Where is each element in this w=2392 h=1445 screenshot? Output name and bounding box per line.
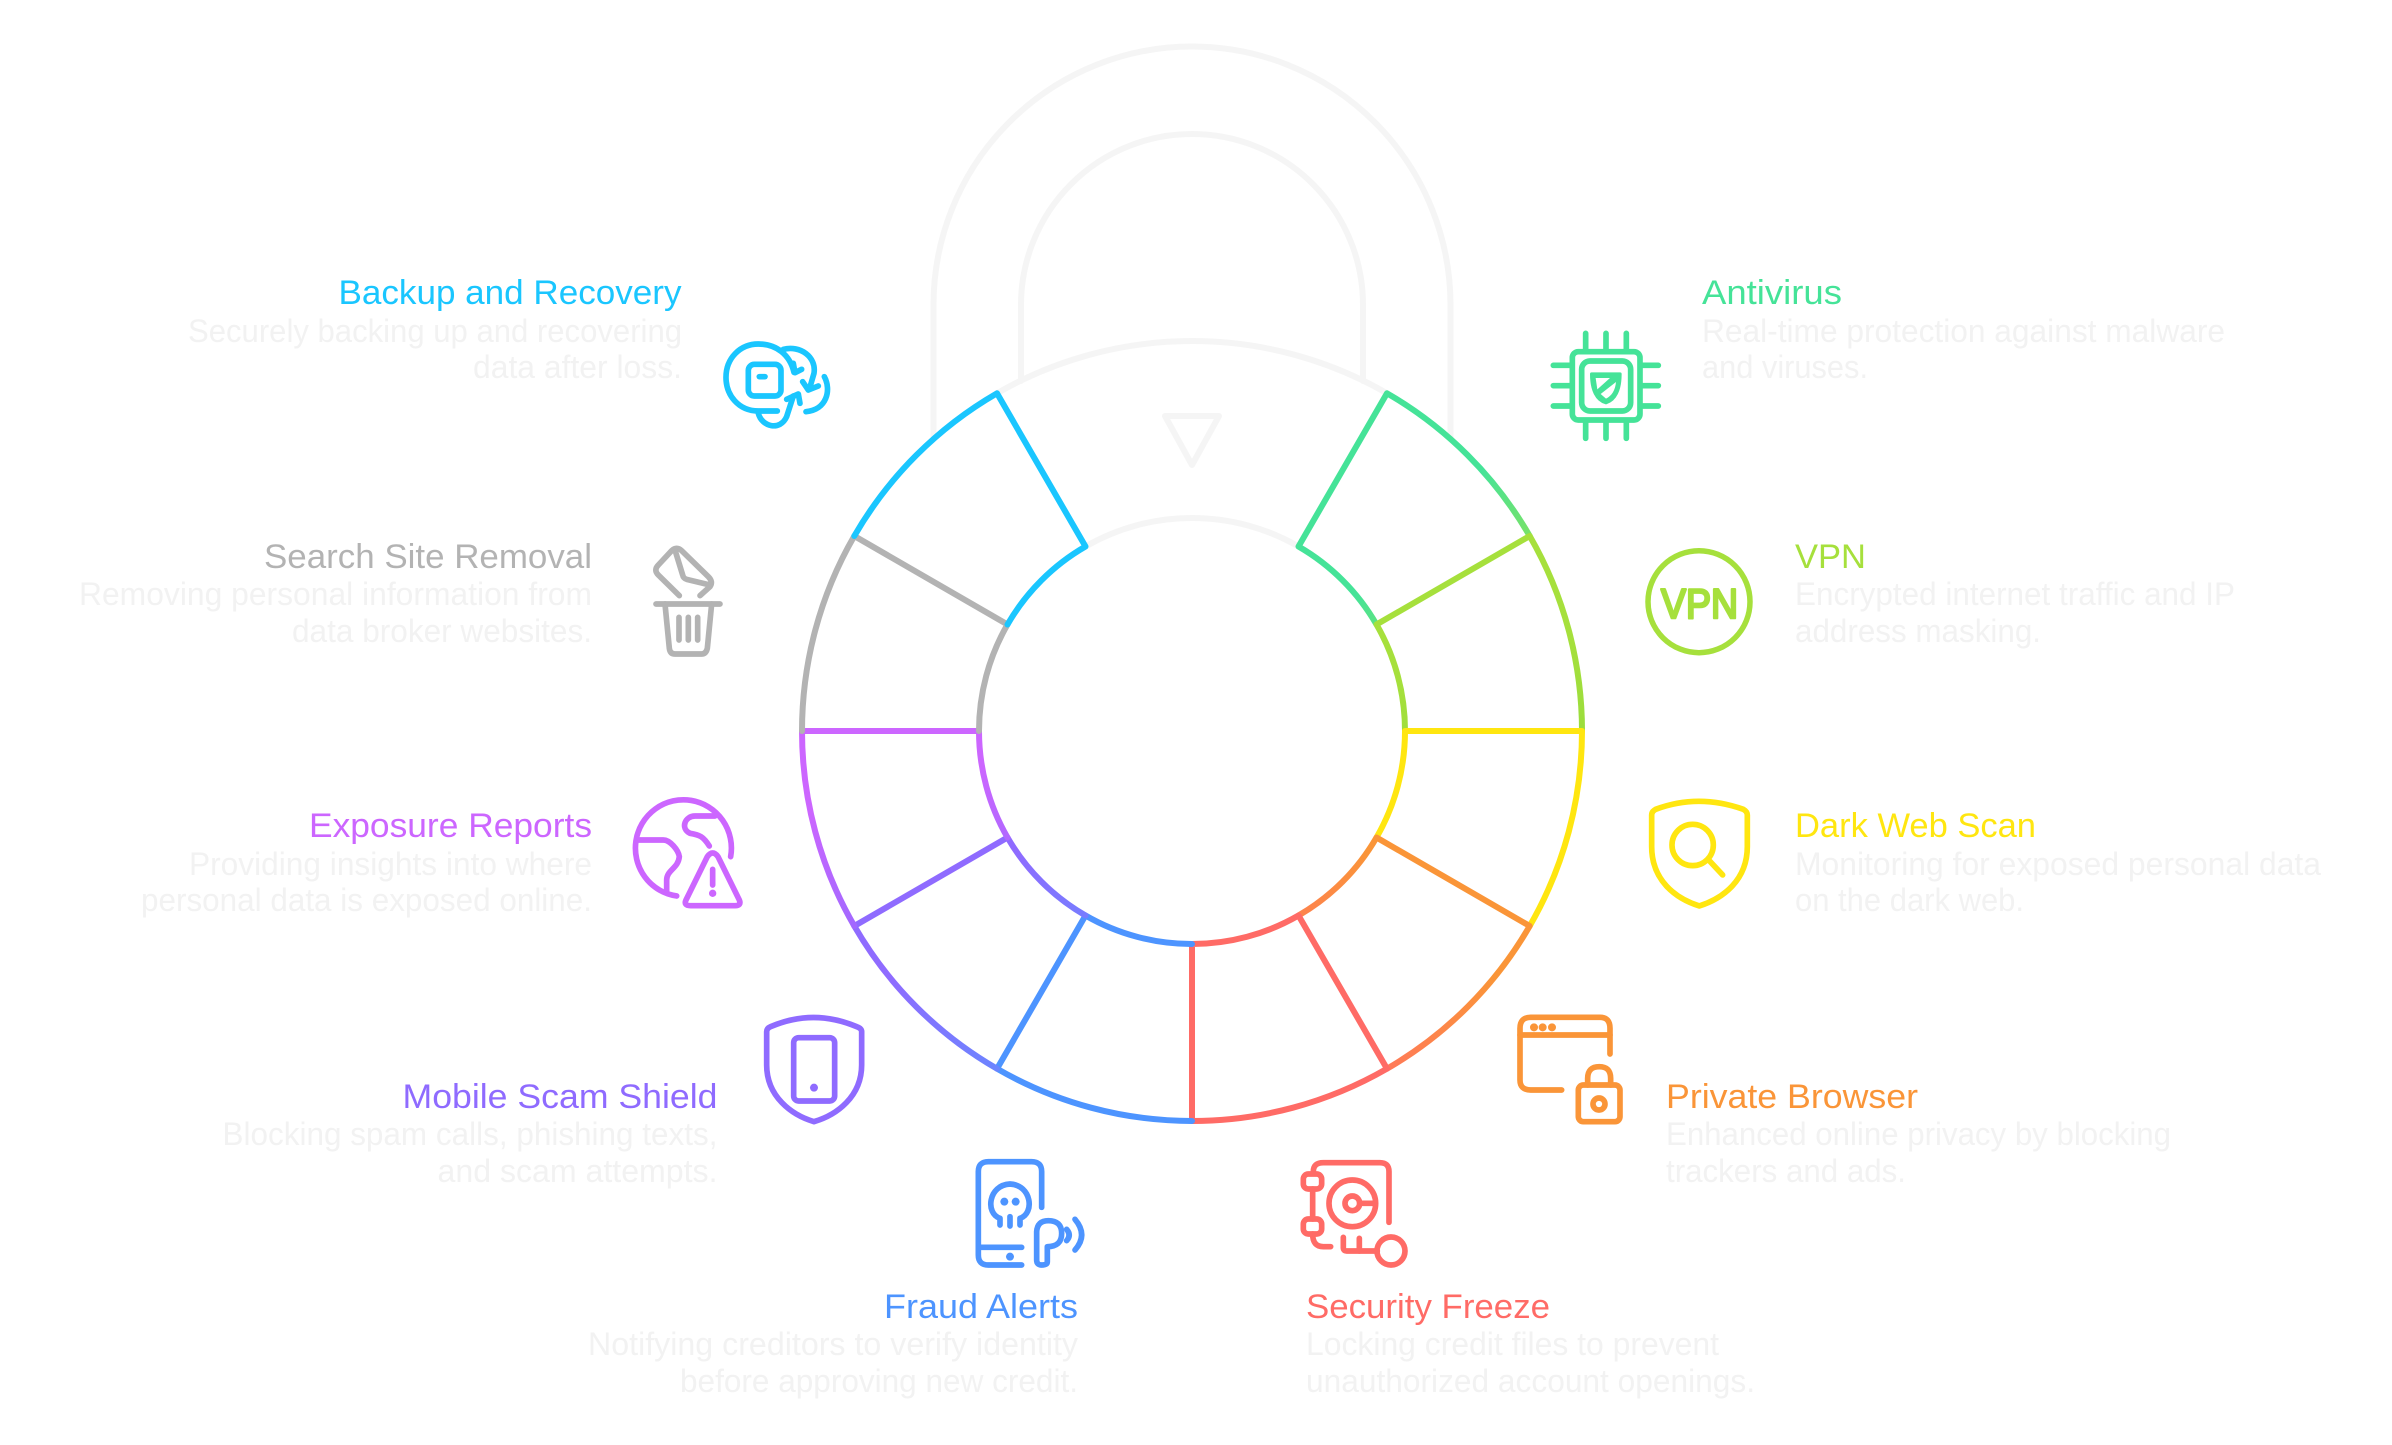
segment: backup and recovery (854, 393, 1086, 624)
label: Private Browser: Enhanced online privacy by blocking (1666, 1116, 2171, 1152)
label: Backup and Recovery: Securely backing up and recovering (188, 313, 682, 349)
label: Fraud Alerts: before approving new credit. (680, 1363, 1078, 1399)
padlock outline (934, 47, 1451, 547)
segment: fraud alerts (997, 916, 1192, 1121)
segment: antivirus (1298, 393, 1530, 624)
label: Security Freeze: unauthorized account openings. (1306, 1363, 1755, 1399)
label: Exposure Reports: Providing insights into where (189, 846, 592, 882)
label: Exposure Reports: personal data is exposed online. (141, 882, 592, 918)
icon: phone with skull and earbud (978, 1162, 1082, 1265)
icon: safe with key (1303, 1163, 1405, 1265)
icon: VPN badge (1648, 551, 1750, 653)
label: Dark Web Scan: Dark Web Scan (1795, 807, 2036, 845)
label: Backup and Recovery (188, 274, 682, 385)
label: Antivirus: Real-time protection against malware (1702, 313, 2225, 349)
keyhole triangle (1165, 416, 1219, 465)
label: Antivirus (1702, 274, 2225, 385)
label: Fraud Alerts: Fraud Alerts (884, 1288, 1078, 1326)
label: Antivirus: Antivirus (1702, 274, 1842, 312)
label: Exposure Reports: Exposure Reports (309, 807, 592, 845)
icon: backup cloud with arrows (726, 344, 828, 426)
label: Security Freeze: Security Freeze (1306, 1288, 1550, 1326)
segment: exposure reports (802, 731, 1008, 926)
label: Search Site Removal (79, 538, 592, 649)
segment: security freeze (1192, 916, 1387, 1121)
lock body inner arc (1086, 518, 1298, 546)
lock body top arc (997, 341, 1387, 393)
label: Search Site Removal: data broker websites. (292, 613, 592, 649)
label: Fraud Alerts: Notifying creditors to verify identity (588, 1326, 1078, 1362)
segmented ring (802, 393, 1582, 1121)
label: Private Browser: Private Browser (1666, 1078, 1918, 1116)
outer shackle (934, 47, 1451, 438)
label: Dark Web Scan: Monitoring for exposed personal data (1795, 846, 2321, 882)
label: Backup and Recovery: data after loss. (473, 349, 682, 385)
icon: shield with magnifier (1652, 801, 1747, 906)
label: Backup and Recovery: Backup and Recovery (338, 274, 682, 312)
label: Fraud Alerts (588, 1288, 1078, 1399)
label: Search Site Removal: Removing personal information from (79, 576, 592, 612)
label: Security Freeze (1306, 1288, 1755, 1399)
icon: VPN badge: VPN (1661, 580, 1738, 627)
label: Mobile Scam Shield (222, 1078, 718, 1189)
label: Dark Web Scan: on the dark web. (1795, 882, 2024, 918)
icon: shield with phone (767, 1017, 862, 1122)
label: Private Browser: trackers and ads. (1666, 1153, 1906, 1189)
label: VPN: VPN (1795, 538, 1866, 576)
segment: private browser (1298, 838, 1530, 1069)
label: Exposure Reports (141, 807, 592, 918)
inner shackle (1021, 134, 1363, 381)
label: Dark Web Scan (1795, 807, 2321, 918)
label: Antivirus: and viruses. (1702, 349, 1868, 385)
label: VPN: Encrypted internet traffic and IP (1795, 576, 2235, 612)
segment: VPN (1376, 536, 1582, 731)
label: Search Site Removal: Search Site Removal (264, 538, 592, 576)
label: Security Freeze: Locking credit files to prevent (1306, 1326, 1719, 1362)
label: Private Browser (1666, 1078, 2171, 1189)
icon: trash bin with envelope (656, 548, 720, 654)
icon: globe with warning (635, 800, 740, 906)
label: VPN: address masking. (1795, 613, 2041, 649)
segment: dark web scan (1376, 731, 1582, 926)
label: Mobile Scam Shield: Blocking spam calls, phishing texts, (222, 1116, 718, 1152)
icon: browser with padlock (1520, 1017, 1620, 1122)
segment: mobile scam shield (854, 838, 1086, 1069)
label: VPN (1795, 538, 2235, 649)
icon: chip with shield (1553, 333, 1658, 438)
segment: search site removal (802, 536, 1008, 731)
label: Mobile Scam Shield: and scam attempts. (438, 1153, 718, 1189)
label: Mobile Scam Shield: Mobile Scam Shield (402, 1078, 718, 1116)
